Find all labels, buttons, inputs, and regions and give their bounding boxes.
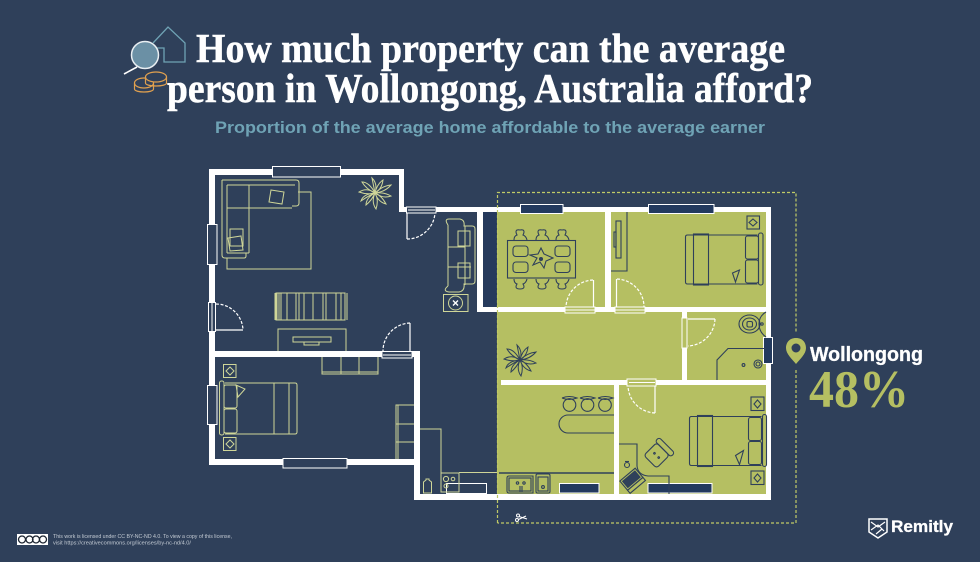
licence text: This work is licensed under CC BY-NC-ND 4.0. To view a copy of this license,	[53, 534, 232, 540]
label: Wollongong: Wollongong	[810, 344, 923, 366]
icon: scissors	[516, 514, 527, 522]
value: 48%: 48%	[809, 361, 909, 419]
kitchen: counter and sink	[499, 473, 614, 493]
icon: location pin	[786, 338, 806, 364]
plant: living room	[359, 178, 391, 209]
bathroom fixtures	[717, 312, 766, 380]
licence text	[53, 534, 232, 546]
title: person in Wollongong, Australia afford?	[167, 65, 813, 111]
subtitle: Proportion of the average home affordable to the average earner	[215, 118, 765, 137]
dashed cut line around the affordable area	[498, 192, 796, 523]
kitchen: stools and bar	[559, 396, 614, 433]
lower right bedroom: bedside tables	[751, 397, 764, 484]
logo: Remitly	[869, 517, 954, 538]
windows	[208, 166, 772, 494]
living room: side sofa and table	[444, 219, 475, 312]
plant: hallway	[504, 345, 536, 376]
living room: woven rug	[275, 293, 347, 320]
lower bedroom: shelves and closet	[322, 357, 414, 459]
upper bedroom: wardrobe and TV	[611, 212, 627, 271]
lower bedroom: bed	[220, 381, 297, 435]
lower right bedroom: bed	[690, 414, 766, 466]
dining table and chairs	[508, 230, 576, 289]
office: desk, chair and laptop	[619, 437, 675, 494]
affordable area shading	[497, 212, 766, 495]
floor plan walls	[209, 169, 771, 500]
title: How much property can the average	[196, 25, 785, 71]
lower bedroom: bedside tables	[224, 364, 236, 450]
licence text: visit https://creativecommons.org/licenses/by-nc-nd/4.0/	[53, 540, 191, 546]
living room: TV unit	[278, 329, 346, 351]
living room: corner sofa and rug	[222, 180, 311, 269]
kitchen counter outside the area	[420, 429, 497, 493]
doors	[208, 207, 715, 413]
title	[167, 25, 813, 111]
navy strip beside dining room	[482, 212, 497, 307]
licence badge	[17, 534, 48, 545]
title icon: house, magnifier and coins	[124, 27, 185, 92]
upper bedroom: bed	[686, 233, 763, 285]
upper bedroom: bedside table	[747, 216, 760, 229]
logo: Remitly: Remitly	[891, 517, 954, 536]
